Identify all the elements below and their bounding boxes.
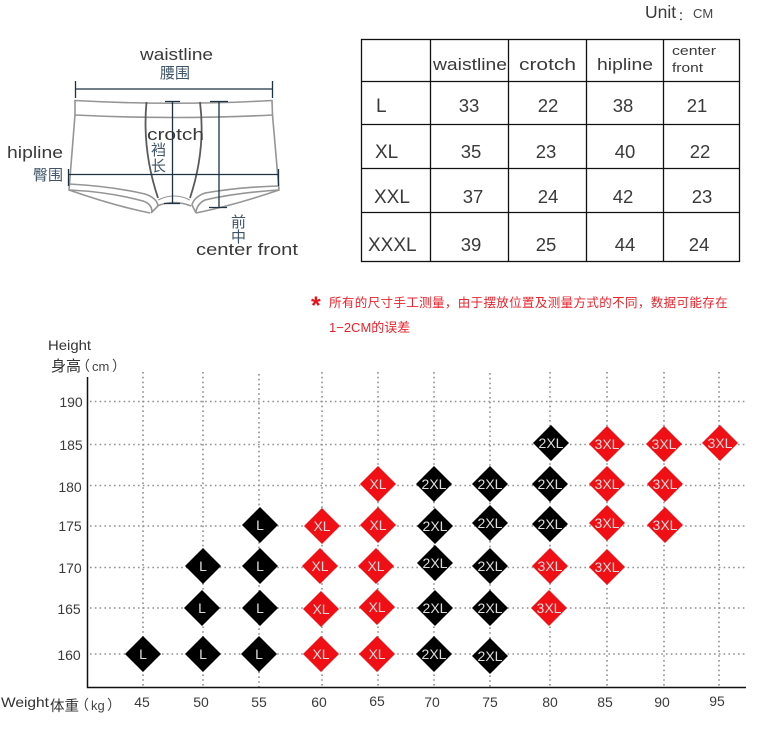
row: L: [376, 95, 707, 117]
panel: size table: [362, 40, 740, 262]
markers: size 2XL: 2XL: [422, 476, 447, 492]
y axis title: cm: [92, 359, 109, 374]
row: XL: 40: [615, 141, 635, 162]
markers: size XL: XL: [311, 558, 329, 574]
x axis labels: 85: [597, 694, 613, 710]
markers: size 2XL: 2XL: [422, 646, 447, 662]
label: center front: 中: [231, 229, 246, 246]
table header: [432, 44, 716, 75]
markers: size 3XL: 3XL: [595, 559, 620, 575]
markers: size XL: XL: [313, 518, 331, 534]
callout: measurement note: 所有的尺寸手工测量，由于摆放位置及测量方式的不同，数据可能存在: [329, 295, 728, 310]
row: XL: [375, 141, 710, 163]
y axis labels: [57, 394, 83, 663]
markers: size L: L: [256, 600, 264, 616]
row: L: 38: [613, 95, 633, 116]
markers: size XL: XL: [368, 646, 386, 662]
row: L: 21: [687, 95, 707, 116]
unit label: [645, 2, 713, 23]
chart axes: [88, 377, 746, 688]
markers: size 2XL: 2XL: [539, 435, 564, 451]
markers: size XL: XL: [368, 599, 386, 615]
markers: size 2XL: 2XL: [538, 516, 563, 532]
y axis labels: 180: [58, 479, 82, 495]
markers: size 3XL: 3XL: [653, 476, 678, 492]
row: XXL: 42: [613, 186, 633, 207]
chart grid: [90, 372, 746, 687]
label: waistline: waistline: [139, 46, 213, 64]
y axis labels: 170: [58, 560, 82, 576]
x axis title: kg: [91, 698, 105, 713]
label: crotch: [147, 126, 204, 175]
row: XXXL: 44: [615, 234, 635, 255]
x axis title: Weight: [1, 694, 49, 710]
row: L: 33: [459, 95, 479, 116]
y axis labels: 160: [57, 647, 81, 663]
table header: crotch: [519, 56, 576, 74]
x axis title: 体重: [50, 698, 79, 715]
markers: size 3XL: 3XL: [537, 600, 562, 616]
row: XL: XL: [375, 142, 398, 163]
markers: size 3XL: 3XL: [538, 558, 563, 574]
x axis labels: 75: [482, 694, 498, 710]
markers: size 3XL: [531, 425, 738, 626]
callout: measurement note: [311, 292, 728, 335]
markers: size L: L: [199, 558, 207, 574]
label: center front: [196, 214, 298, 259]
x axis labels: 55: [251, 694, 267, 710]
row: XXXL: XXXL: [368, 235, 417, 256]
markers: size 3XL: 3XL: [595, 436, 620, 452]
label: center front: 前: [231, 214, 246, 231]
row: XXXL: [368, 234, 709, 256]
x axis title: ）: [107, 697, 121, 713]
markers: size XL: XL: [369, 517, 387, 533]
y axis labels: 190: [59, 394, 83, 410]
label: crotch: 长: [151, 158, 166, 175]
markers: size XL: XL: [369, 476, 387, 492]
table header: front: [672, 61, 704, 75]
markers: size 2XL: 2XL: [423, 518, 448, 534]
row: XL: 22: [690, 141, 710, 162]
row: XXL: 23: [692, 186, 712, 207]
markers: size 2XL: 2XL: [538, 476, 563, 492]
table header: center: [672, 44, 716, 58]
unit label: ：: [678, 9, 690, 23]
callout: measurement note: 1−2CM的误差: [329, 320, 410, 335]
row: L: L: [376, 96, 387, 117]
row: XL: 35: [461, 141, 481, 162]
x axis labels: 65: [369, 693, 385, 709]
markers: size 3XL: 3XL: [595, 515, 620, 531]
row: XL: 23: [536, 141, 556, 162]
x axis labels: 50: [193, 694, 209, 710]
markers: size 2XL: 2XL: [478, 476, 503, 492]
markers: size L: L: [255, 646, 263, 662]
x axis labels: [134, 693, 725, 710]
label: waistline: [139, 46, 213, 82]
y axis title: （: [76, 358, 90, 374]
markers: size XL: XL: [312, 601, 330, 617]
unit label: CM: [693, 6, 713, 21]
label: hipline: [7, 144, 63, 184]
markers: size L: [125, 507, 278, 672]
row: XXL: 37: [463, 186, 483, 207]
x axis labels: 45: [134, 694, 150, 710]
x axis title: （: [75, 697, 89, 713]
markers: size L: L: [198, 600, 206, 616]
x axis labels: 70: [424, 694, 440, 710]
markers: size 2XL: 2XL: [478, 558, 503, 574]
label: hipline: hipline: [7, 144, 63, 162]
markers: size 2XL: 2XL: [478, 515, 503, 531]
row: XXL: 24: [538, 186, 558, 207]
row: XXXL: 25: [536, 234, 556, 255]
y axis labels: 165: [57, 601, 81, 617]
label: waistline: 腰围: [160, 65, 190, 82]
markers: size 2XL: 2XL: [423, 555, 448, 571]
markers: size 3XL: 3XL: [708, 435, 733, 451]
row: L: 22: [538, 95, 558, 116]
unit label: Unit: [645, 2, 676, 22]
x axis labels: 80: [542, 694, 558, 710]
y axis title: ）: [112, 358, 126, 374]
row: XXL: XXL: [374, 187, 410, 208]
markers: size XL: [302, 466, 396, 672]
markers: size 2XL: 2XL: [478, 648, 503, 664]
measurement lines: [68, 81, 278, 208]
y axis title: Height: [48, 337, 91, 353]
y axis title: 身高: [51, 358, 81, 375]
label: crotch: 裆: [151, 142, 166, 159]
markers: size 3XL: 3XL: [595, 476, 620, 492]
row: XXXL: 24: [689, 234, 709, 255]
label: center front: center front: [196, 241, 298, 259]
callout: measurement note: *: [311, 292, 321, 320]
markers: size XL: XL: [312, 646, 330, 662]
markers: size 3XL: 3XL: [653, 517, 678, 533]
x axis title: [1, 694, 121, 715]
y axis title: [48, 337, 126, 375]
markers: size 2XL: 2XL: [423, 600, 448, 616]
icon: briefs outline: [69, 100, 279, 213]
markers: size L: L: [256, 517, 264, 533]
markers: size L: L: [139, 646, 147, 662]
y axis labels: 185: [59, 437, 83, 453]
y axis labels: 175: [58, 518, 82, 534]
panel: garment measurement diagram: [7, 46, 298, 259]
markers: size 2XL: 2XL: [478, 600, 503, 616]
table header: waistline: [432, 56, 507, 74]
x axis labels: 95: [709, 693, 725, 709]
x axis labels: 90: [654, 694, 670, 710]
label: crotch: crotch: [147, 126, 204, 144]
label: hipline: 臀围: [33, 167, 63, 184]
markers: size L: L: [199, 646, 207, 662]
markers: size XL: XL: [367, 558, 385, 574]
row: XXL: [374, 186, 712, 208]
markers: size 2XL: [416, 425, 569, 674]
markers: size 3XL: 3XL: [652, 436, 677, 452]
row: XXXL: 39: [461, 234, 481, 255]
markers: size L: L: [256, 558, 264, 574]
x axis labels: 60: [311, 694, 327, 710]
table header: hipline: [597, 56, 653, 74]
chart: height and weight size grid: [1, 337, 746, 715]
